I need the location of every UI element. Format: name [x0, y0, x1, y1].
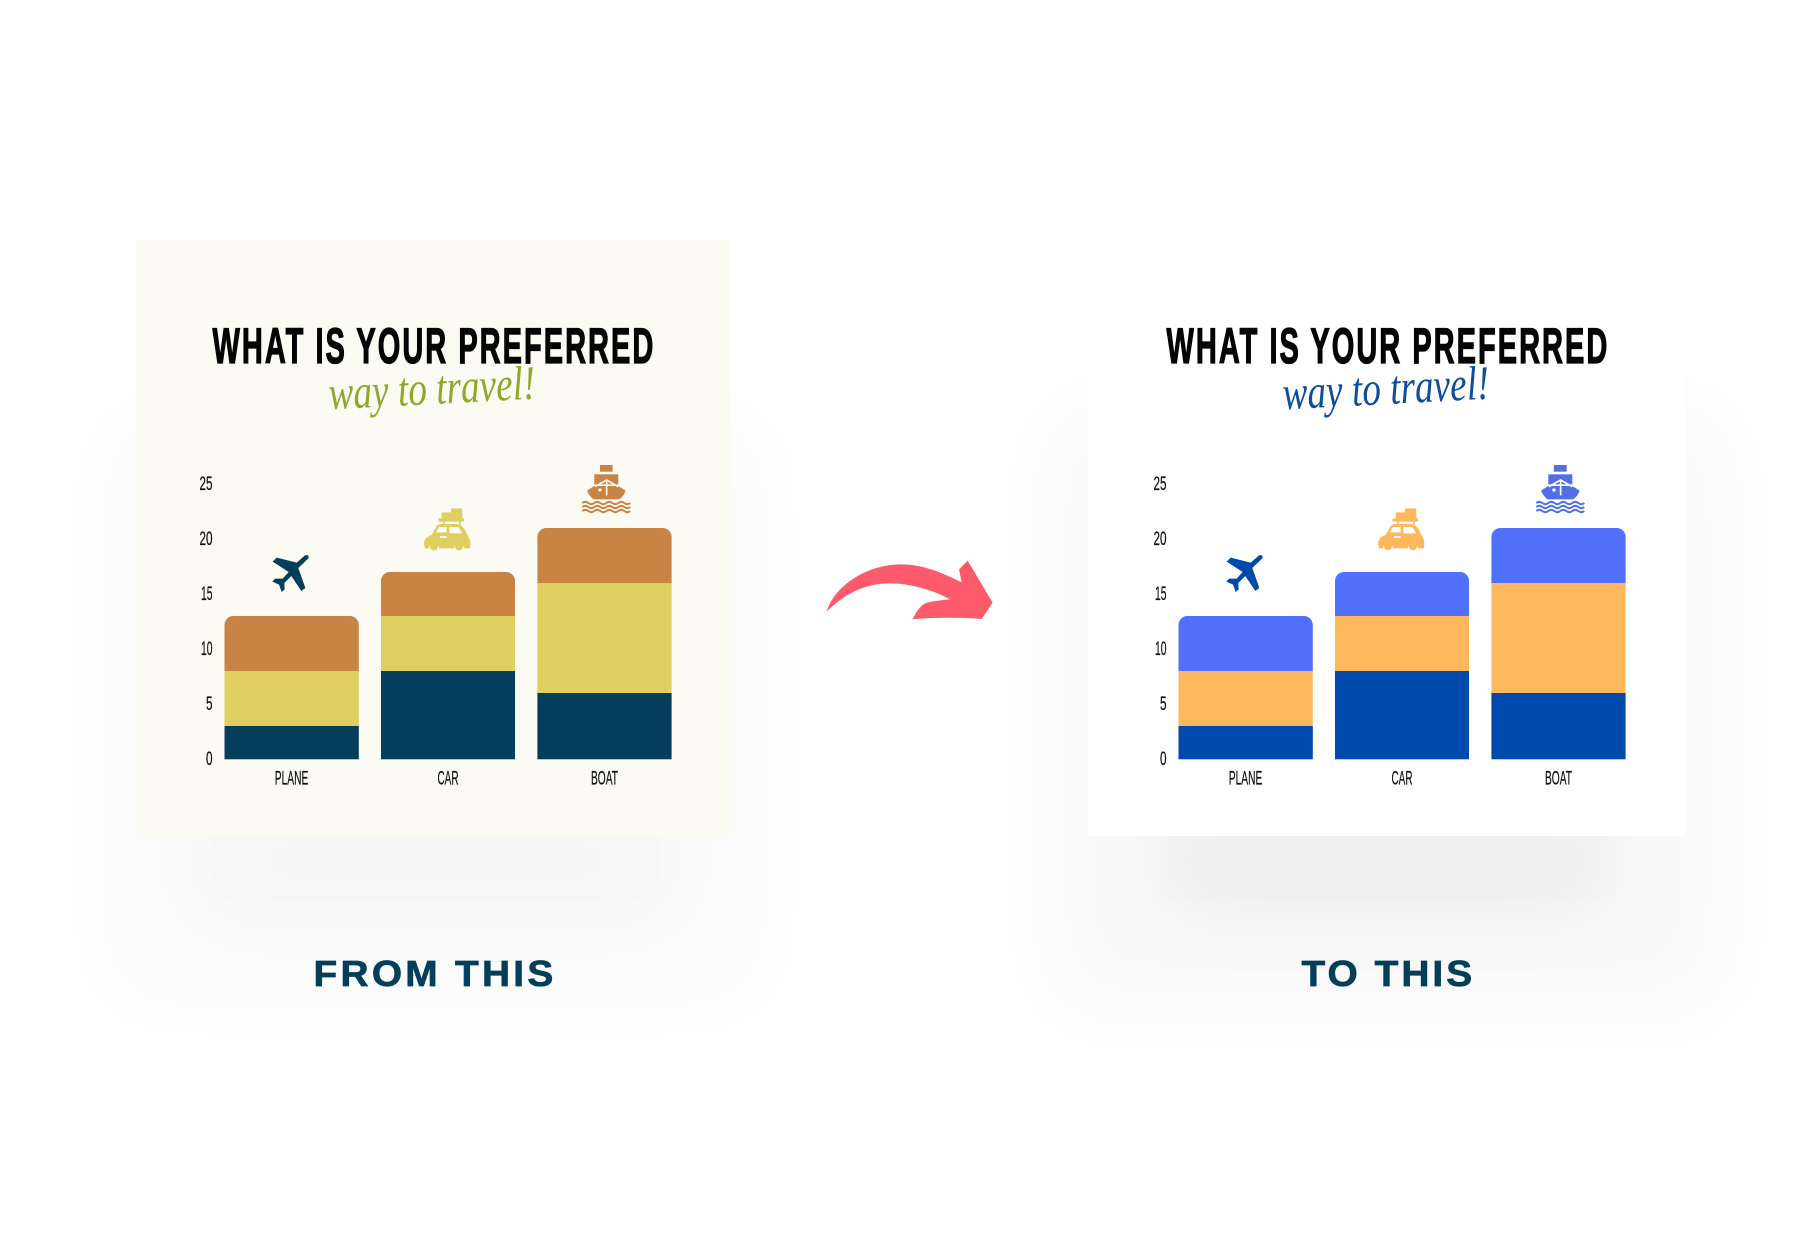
- y axis labels: 0: [206, 749, 212, 770]
- subtitle script: way to travel!: [1281, 357, 1491, 420]
- icon: boat: [1536, 465, 1584, 512]
- icon: car: [1378, 508, 1424, 550]
- bar: car: [381, 572, 515, 759]
- y axis labels: [200, 474, 212, 770]
- category labels: [1229, 768, 1572, 790]
- y axis labels: 5: [206, 694, 212, 715]
- y axis labels: 15: [201, 584, 212, 605]
- label: from this: FROM THIS: [314, 953, 553, 994]
- soft shadow: right panel: [1040, 400, 1735, 1020]
- subtitle script: way to travel!: [327, 357, 537, 420]
- panel: from this: [136, 240, 731, 836]
- category labels: CAR: [1392, 768, 1412, 790]
- y axis labels: 10: [1155, 639, 1166, 660]
- bar: boat: [1491, 528, 1626, 759]
- soft shadow: left panel: [90, 400, 780, 1020]
- bar: plane: [1178, 616, 1313, 759]
- icon: plane: [272, 555, 309, 592]
- title: WHAT IS YOUR PREFERRED: [1166, 318, 1607, 374]
- category labels: CAR: [438, 768, 458, 790]
- arrow: [827, 561, 993, 619]
- y axis labels: 0: [1160, 749, 1166, 770]
- category labels: PLANE: [1229, 768, 1262, 790]
- title: WHAT IS YOUR PREFERRED: [212, 318, 653, 374]
- y axis labels: 25: [200, 474, 212, 495]
- y axis labels: 20: [1154, 529, 1166, 550]
- y axis labels: 15: [1155, 584, 1166, 605]
- icon: boat: [582, 465, 630, 512]
- icon: car: [424, 508, 470, 550]
- y axis labels: 5: [1160, 694, 1166, 715]
- category labels: PLANE: [275, 768, 308, 790]
- y axis labels: [1154, 474, 1166, 770]
- y axis labels: 10: [201, 639, 212, 660]
- y axis labels: 20: [200, 529, 212, 550]
- bar: plane: [224, 616, 359, 759]
- category labels: BOAT: [591, 768, 618, 790]
- bar: boat: [537, 528, 672, 759]
- label: to this: TO THIS: [1302, 953, 1472, 994]
- category labels: BOAT: [1545, 768, 1572, 790]
- category labels: [275, 768, 618, 790]
- y axis labels: 25: [1154, 474, 1166, 495]
- bar: car: [1335, 572, 1469, 759]
- panel: to this: [1088, 240, 1685, 836]
- icon: plane: [1226, 555, 1263, 592]
